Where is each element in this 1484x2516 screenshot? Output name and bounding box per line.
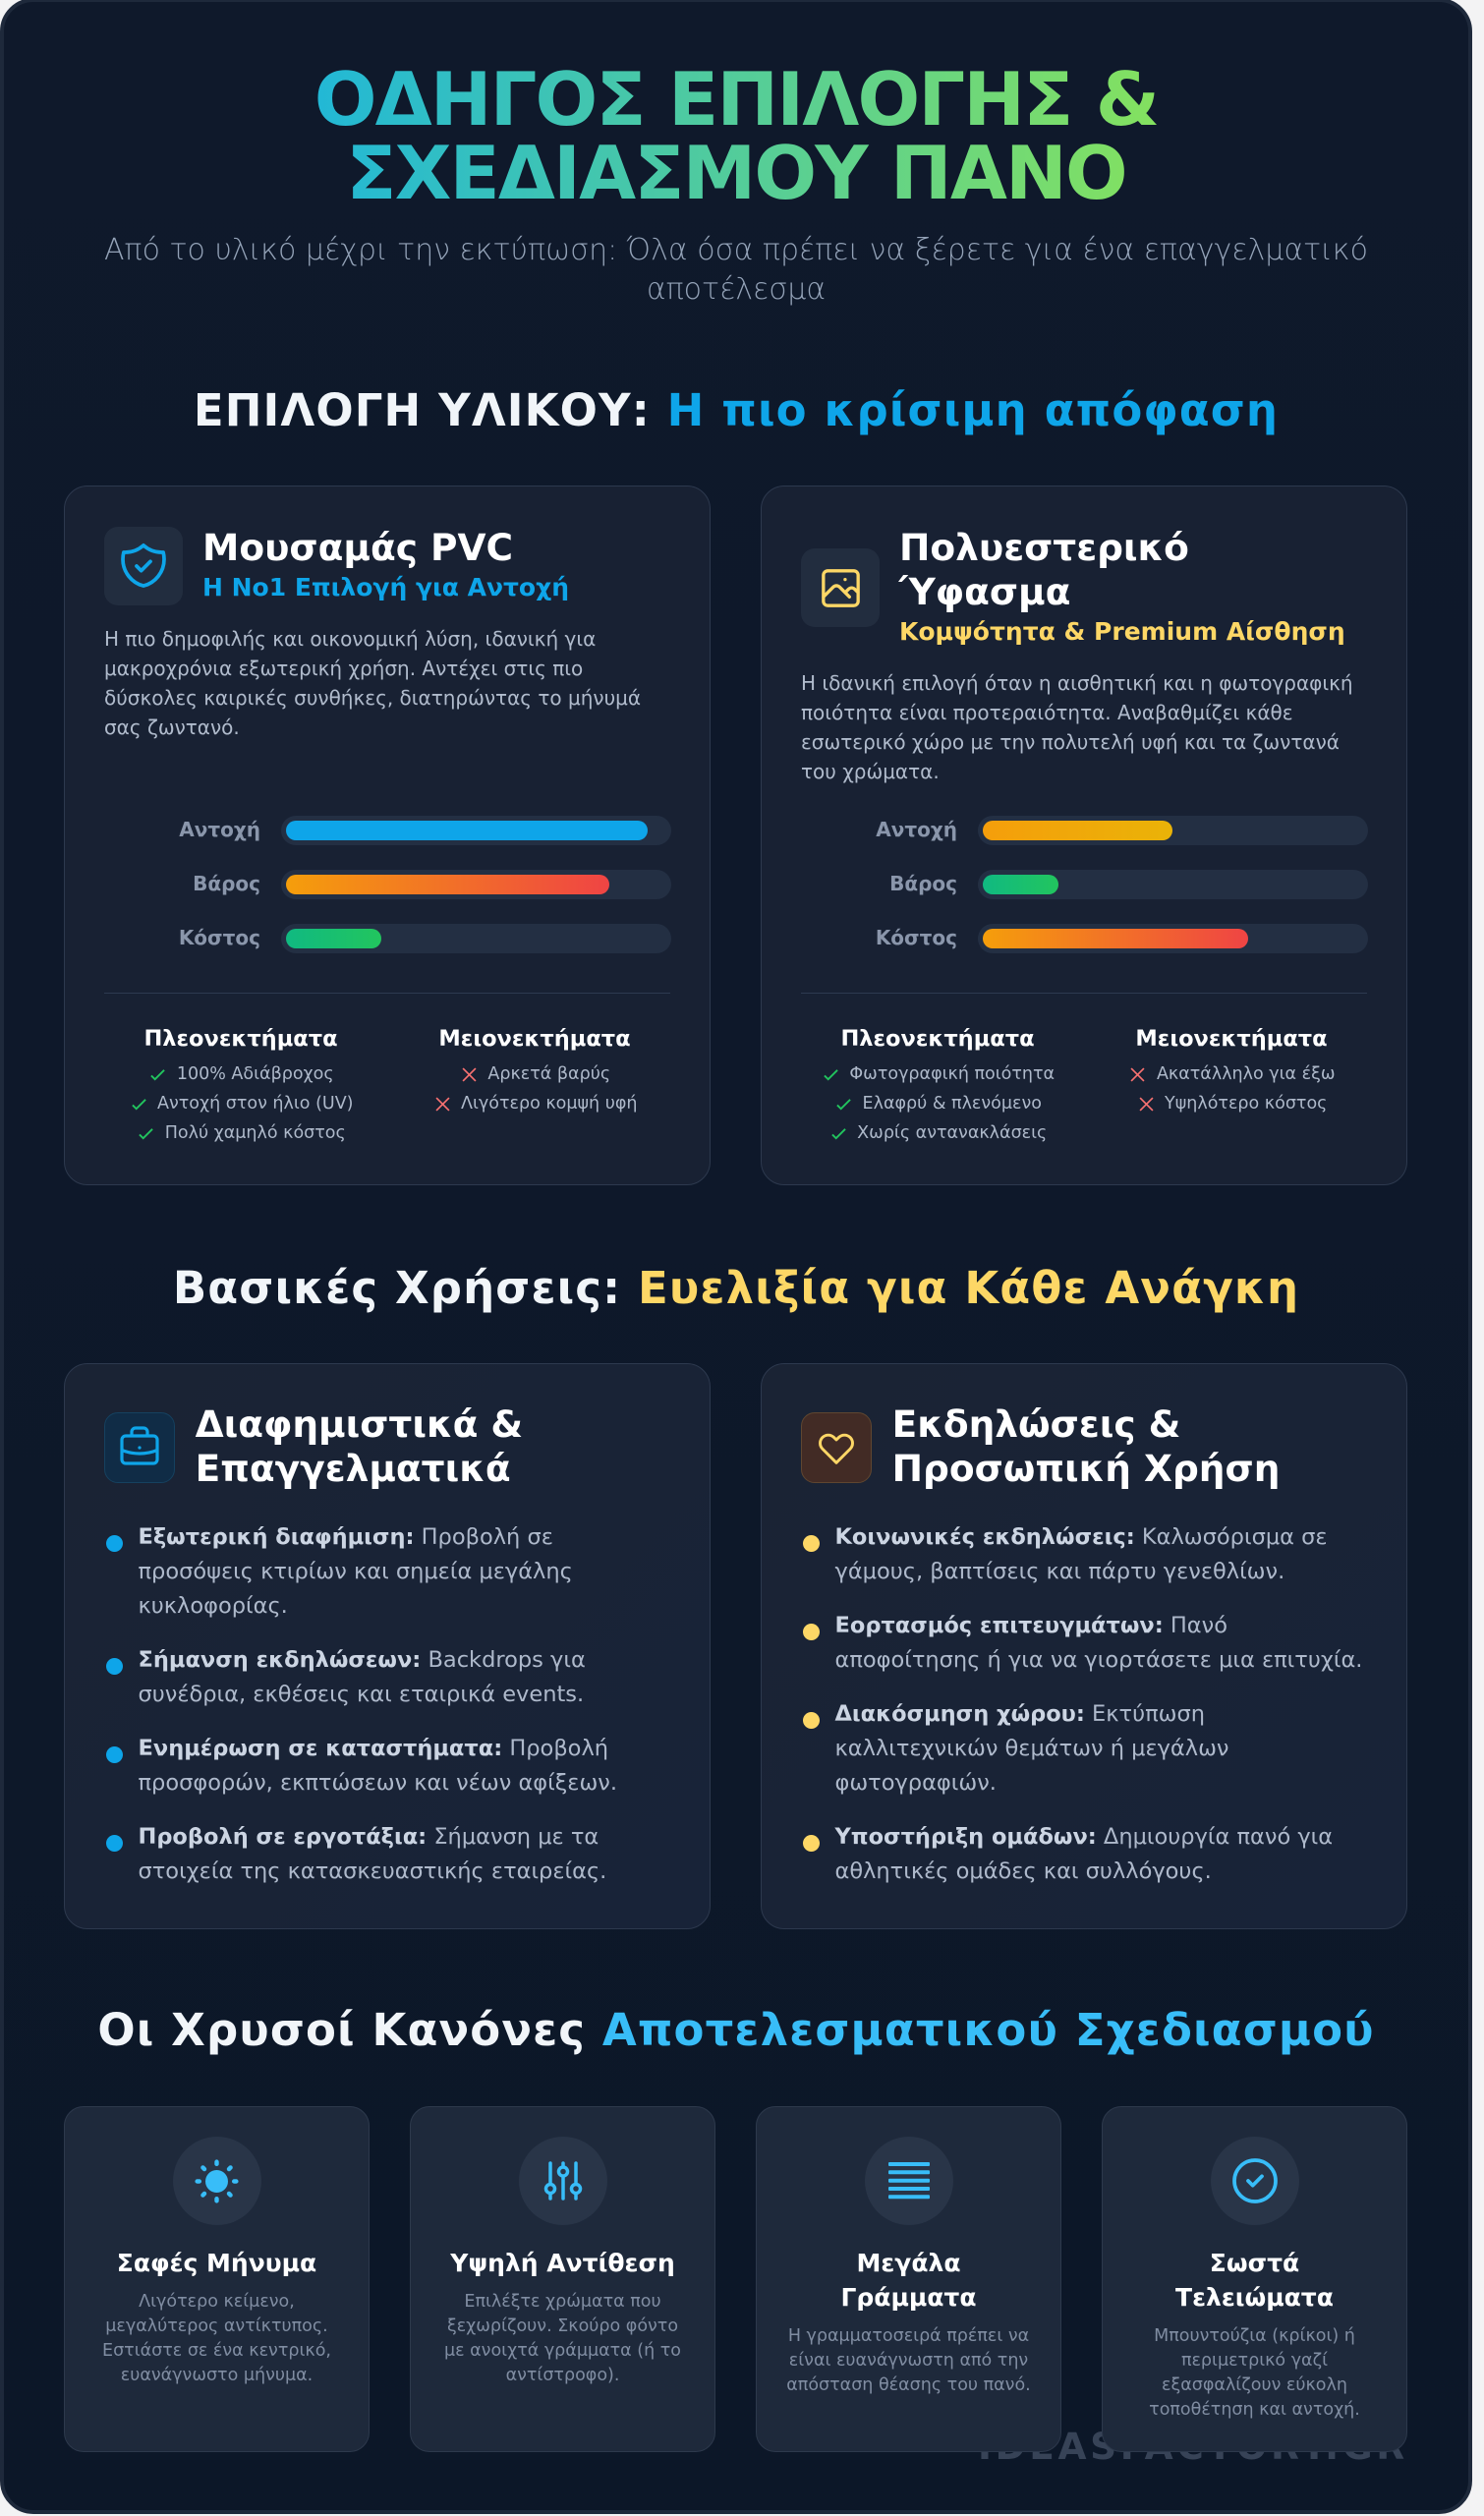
use item: Σήμανση εκδηλώσεων: Backdrops για [138, 1647, 586, 1673]
title: ΣΧΕΔΙΑΣΜΟΥ ΠΑΝΟ [346, 130, 1126, 216]
use item [803, 1824, 1333, 1883]
pros list: Πλεονεκτήματα [143, 1026, 338, 1052]
use item [106, 1647, 586, 1706]
card title: Ύφασμα [899, 570, 1070, 613]
card title: Μουσαμάς PVC [202, 525, 513, 568]
rule title: Σαφές Μήνυμα [117, 2249, 316, 2277]
rule text: εξασφαλίζουν εύκολη [1162, 2374, 1347, 2394]
rule text: Εστιάστε σε ένα κεντρικό, [102, 2341, 331, 2361]
use item: προσφορών, εκπτώσεων και νέων αφίξεων. [138, 1769, 617, 1795]
use item: στοιχεία της κατασκευαστικής εταιρείας. [138, 1858, 606, 1883]
icon: sliders [519, 2137, 607, 2225]
subtitle [104, 233, 1368, 307]
cons list [436, 1026, 637, 1114]
rule title [840, 2249, 977, 2312]
description: του χρώματα. [801, 760, 940, 783]
bar chart: polyester ratings: Αντοχή [876, 818, 957, 841]
bar chart: polyester ratings: Κόστος [876, 926, 957, 949]
icon: shield [104, 527, 183, 605]
description: δύσκολες καιρικές συνθήκες, διατηρώντας το μήνυμά [104, 686, 641, 710]
pros list: Πολύ χαμηλό κόστος [165, 1123, 346, 1143]
bar chart: polyester ratings: Βάρος [889, 872, 957, 895]
icon: text lines [865, 2137, 953, 2225]
use item [803, 1524, 1328, 1584]
use item: Κοινωνικές εκδηλώσεις: Καλωσόρισμα σε [835, 1524, 1328, 1550]
icon: heart [801, 1412, 872, 1483]
pros list: Αντοχή στον ήλιο (UV) [157, 1094, 354, 1114]
use item: Εορτασμός επιτευγμάτων: Πανό [835, 1612, 1227, 1637]
use item: Προβολή σε εργοτάξια: Σήμανση με τα [138, 1824, 599, 1850]
use item: κυκλοφορίας. [138, 1593, 288, 1619]
bar chart: PVC ratings: Κόστος [179, 926, 260, 949]
rule text: ξεχωρίζουν. Σκούρο φόντο [447, 2316, 678, 2335]
card title: Εκδηλώσεις & [892, 1401, 1180, 1445]
rule text: απόσταση θέασης του πανό. [786, 2374, 1031, 2394]
card subtitle: Η Νο1 Επιλογή για Αντοχή [202, 573, 569, 601]
use item: φωτογραφιών. [835, 1770, 997, 1796]
title [314, 56, 1158, 216]
pros list: Χωρίς αντανακλάσεις [857, 1123, 1047, 1143]
rule text: τοποθέτηση και αντοχή. [1149, 2400, 1360, 2420]
rule text [444, 2292, 681, 2384]
panel: big letters [756, 2106, 1061, 2452]
heading: golden rules: Οι Χρυσοί Κανόνες Αποτελεσματικού Σχεδιασμού [97, 2004, 1375, 2056]
description [104, 627, 641, 739]
panel: advertising and professional [64, 1363, 711, 1929]
subtitle: αποτέλεσμα [647, 272, 826, 307]
card title: Επαγγελματικά [196, 1447, 511, 1490]
rule text: περιμετρικό γαζί [1181, 2351, 1328, 2371]
subtitle: Από το υλικό μέχρι την εκτύπωση: Όλα όσα πρέπει να ξέρετε για ένα επαγγελματικό [104, 233, 1368, 267]
use item: Διακόσμηση χώρου: Εκτύπωση [835, 1701, 1205, 1727]
panel: high contrast [410, 2106, 715, 2452]
card title: Διαφημιστικά & [196, 1401, 523, 1445]
description: σας ζωντανό. [104, 715, 240, 739]
card title [892, 1401, 1280, 1490]
use item: αθλητικές ομάδες και συλλόγους. [835, 1858, 1212, 1883]
rule text: μεγαλύτερος αντίκτυπος. [105, 2316, 328, 2335]
card title [898, 525, 1189, 613]
pros list [132, 1026, 354, 1143]
icon: image [801, 548, 880, 627]
cons list [1130, 1026, 1336, 1114]
use item: Ενημέρωση σε καταστήματα: Προβολή [138, 1736, 608, 1761]
pros list [824, 1026, 1055, 1143]
use item [106, 1824, 606, 1883]
bar chart: polyester ratings [876, 816, 1368, 953]
use item: καλλιτεχνικών θεμάτων ή μεγάλων [835, 1736, 1228, 1761]
rule title: Τελειώματα [1175, 2283, 1334, 2312]
rule title: Γράμματα [840, 2283, 977, 2312]
cons list: Λιγότερο κομψή υφή [461, 1094, 637, 1114]
use item: Υποστήριξη ομάδων: Δημιουργία πανό για [835, 1824, 1333, 1850]
panel: polyester [761, 486, 1407, 1185]
description: Η πιο δημοφιλής και οικονομική λύση, ιδανική για [104, 627, 596, 651]
rule text: Μπουντούζια (κρίκοι) ή [1154, 2325, 1355, 2345]
rule title: Σωστά [1210, 2249, 1299, 2277]
use item: Εξωτερική διαφήμιση: Προβολή σε [138, 1524, 553, 1550]
panel: correct finishes [1102, 2106, 1407, 2452]
heading: basic uses: Βασικές Χρήσεις: Ευελιξία για Κάθε Ανάγκη [173, 1262, 1299, 1313]
cons list: Αρκετά βαρύς [487, 1064, 610, 1084]
cons list: Ακατάλληλο για έξω [1157, 1064, 1336, 1084]
icon: check circle [1211, 2137, 1299, 2225]
rule text: Η γραμματοσειρά πρέπει να [788, 2325, 1029, 2345]
rule text: Λιγότερο κείμενο, [139, 2292, 295, 2312]
use item [106, 1524, 573, 1619]
rule text [102, 2292, 331, 2384]
rule text: είναι ευανάγνωστη από την [789, 2351, 1028, 2371]
panel: PVC [64, 486, 711, 1185]
card title: Πολυεστερικό [899, 525, 1189, 568]
bar chart: PVC ratings: Αντοχή [179, 818, 260, 841]
use item [106, 1736, 617, 1795]
rule text: Επιλέξτε χρώματα που [464, 2292, 661, 2312]
rule text [786, 2325, 1031, 2394]
card title: Προσωπική Χρήση [892, 1447, 1280, 1490]
watermark: IDEASFACTORY.GR [978, 2425, 1408, 2468]
icon: briefcase [104, 1412, 175, 1483]
icon: sun [173, 2137, 261, 2225]
description: μακροχρόνια εξωτερική χρήση. Αντέχει στις πιο [104, 657, 583, 680]
rule title: Μεγάλα [857, 2249, 961, 2277]
cons list: Μειονεκτήματα [1135, 1026, 1328, 1052]
description: Η ιδανική επιλογή όταν η αισθητική και η φωτογραφική [801, 671, 1353, 695]
description: ποιότητα είναι προτεραιότητα. Αναβαθμίζει κάθε [801, 701, 1293, 724]
bar chart: PVC ratings: Βάρος [193, 872, 260, 895]
title: ΟΔΗΓΟΣ ΕΠΙΛΟΓΗΣ & [314, 56, 1158, 143]
use item: προσόψεις κτιρίων και σημεία μεγάλης [138, 1559, 573, 1584]
cons list: Υψηλότερο κόστος [1165, 1094, 1327, 1114]
cons list: Μειονεκτήματα [438, 1026, 631, 1052]
pros list: 100% Αδιάβροχος [177, 1064, 334, 1084]
rule text: ευανάγνωστο μήνυμα. [121, 2365, 313, 2384]
rule title [1175, 2249, 1334, 2312]
panel: clear message [64, 2106, 370, 2452]
pros list: Πλεονεκτήματα [840, 1026, 1035, 1052]
pros list: Ελαφρύ & πλενόμενο [863, 1094, 1042, 1114]
description: εσωτερικό χώρο με την πολυτελή υφή και τα ζωντανά [801, 730, 1340, 754]
description [801, 671, 1353, 783]
use item [803, 1701, 1228, 1796]
rule text: με ανοιχτά γράμματα (ή το [444, 2341, 681, 2361]
pros list: Φωτογραφική ποιότητα [849, 1064, 1055, 1084]
rule text: αντίστροφο). [506, 2365, 619, 2384]
use item: συνέδρια, εκθέσεις και εταιρικά events. [138, 1681, 584, 1706]
rule title: Υψηλή Αντίθεση [450, 2249, 675, 2277]
card title [195, 1401, 523, 1490]
heading: material choice: ΕΠΙΛΟΓΗ ΥΛΙΚΟΥ: Η πιο κρίσιμη απόφαση [194, 384, 1279, 436]
card subtitle: Κομψότητα & Premium Αίσθηση [899, 617, 1345, 646]
use item: γάμους, βαπτίσεις και πάρτυ γενεθλίων. [835, 1559, 1284, 1584]
rule text [1149, 2325, 1360, 2420]
use item: αποφοίτησης ή για να γιορτάσετε μια επιτυχία. [835, 1647, 1362, 1673]
bar chart: PVC ratings [179, 816, 671, 953]
use item [803, 1612, 1362, 1673]
panel: events and personal [761, 1363, 1407, 1929]
